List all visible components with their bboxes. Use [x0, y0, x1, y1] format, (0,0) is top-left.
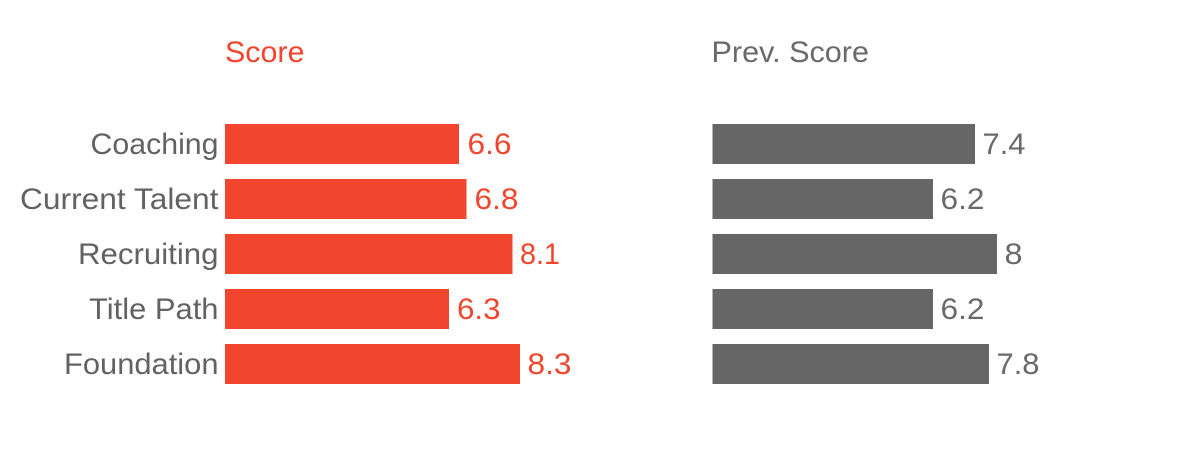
- score values: 8.3: [528, 348, 572, 381]
- panel: previous score bars: [712, 124, 997, 384]
- category labels: [20, 128, 219, 381]
- previous score values: 7.4: [982, 128, 1026, 161]
- previous score values: 8: [1004, 238, 1022, 271]
- score values: 8.1: [520, 238, 560, 271]
- category labels: Recruiting: [78, 238, 218, 271]
- score values: 6.6: [468, 128, 512, 161]
- previous score values: 7.8: [996, 348, 1040, 381]
- heading: Prev. Score: Prev. Score: [712, 36, 869, 69]
- category labels: Coaching: [90, 128, 218, 161]
- score values: 6.3: [457, 293, 500, 326]
- previous score values: 6.2: [940, 183, 984, 216]
- heading: Score: Score: [225, 36, 304, 69]
- score values: [457, 128, 572, 381]
- category labels: Title Path: [89, 293, 218, 326]
- previous score values: 6.2: [940, 293, 984, 326]
- previous score values: [940, 128, 1040, 381]
- category labels: Current Talent: [20, 183, 219, 216]
- category labels: Foundation: [64, 348, 218, 381]
- score values: 6.8: [474, 183, 518, 216]
- panel: score bars: [225, 124, 520, 384]
